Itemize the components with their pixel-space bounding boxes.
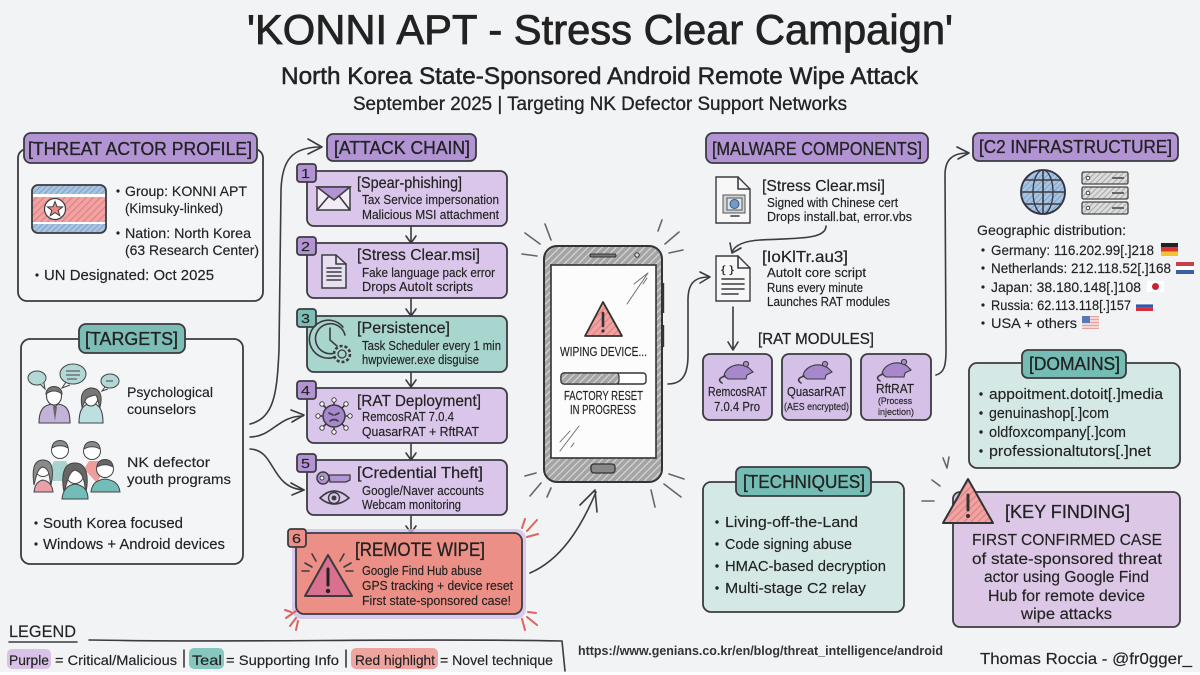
- text: group and nation: (63 Research Center): [125, 242, 259, 258]
- icon: globe: [1021, 170, 1065, 214]
- text: target scope: South Korea focused: [43, 515, 183, 532]
- author credit: Thomas Roccia - @fr0gger_: [980, 651, 1193, 668]
- text: geographic distribution: Netherlands: 212.118.52[.]168: [991, 260, 1171, 276]
- step 4: RAT deployment: [297, 381, 507, 443]
- step 5: credential theft: Webcam monitoring: [362, 498, 461, 512]
- step 2: stress clear msi: [297, 237, 507, 298]
- step 6: remote wipe: GPS tracking + device reset: [362, 579, 514, 593]
- text: IoKlTr script: AutoIt core script: [767, 266, 867, 280]
- module: RftRAT: (Process: [878, 396, 912, 407]
- heading: malware components: [MALWARE COMPONENTS]: [712, 139, 922, 159]
- module: RemcosRAT: 7.0.4 Pro: [714, 400, 760, 414]
- step 3: persistence: Task Scheduler every 1 min: [362, 339, 501, 353]
- text: geographic distribution: USA + others: [991, 315, 1077, 331]
- text: group and nation: Nation: North Korea: [125, 225, 251, 241]
- module: QuasarRAT: (AES encrypted): [784, 402, 849, 413]
- text: group and nation: [116, 183, 259, 258]
- text: psychological counselors: Psychological: [127, 384, 213, 400]
- text: group and nation: Group: KONNI APT: [125, 183, 247, 199]
- phone: wiping device: IN PROGRESS: [570, 403, 636, 417]
- chain arrows: [406, 227, 416, 533]
- heading: C2 infrastructure: [C2 INFRASTRUCTURE]: [979, 137, 1172, 157]
- panel: legend: [7, 622, 565, 671]
- step 3: persistence: [297, 309, 507, 372]
- text: key finding body: wipe attacks: [1020, 606, 1112, 623]
- panel: targets: [21, 324, 243, 564]
- panel: key finding: [922, 457, 1180, 627]
- icon: server rack: [1082, 172, 1128, 214]
- text: key finding body: FIRST CONFIRMED CASE: [972, 532, 1162, 549]
- heading: threat actor profile: [THREAT ACTOR PROFILE]: [28, 139, 252, 159]
- panel: C2 infrastructure: [973, 133, 1194, 331]
- step 6: remote wipe: [REMOTE WIPE]: [355, 540, 485, 561]
- text: stress clear msi: [Stress Clear.msi]: [762, 178, 885, 195]
- step 4: RAT deployment: QuasarRAT + RftRAT: [362, 425, 479, 439]
- text: domain list: appoitment.dotoit[.]media: [989, 386, 1164, 403]
- icon: rat: [878, 359, 911, 381]
- text: technique list: Living-off-the-Land: [725, 514, 858, 531]
- text: NK defector youth programs: NK defector: [127, 454, 210, 470]
- icon: clock and gear: [309, 320, 350, 362]
- text: stress clear msi: Signed with Chinese cert: [767, 196, 898, 210]
- icon: rat: [799, 361, 832, 383]
- panel: domains: [969, 350, 1180, 468]
- text: psychological counselors: counselors: [127, 401, 196, 417]
- step 6: remote wipe: Google Find Hub abuse: [362, 564, 482, 578]
- heading: C2 infrastructure: [973, 133, 1178, 161]
- source URL: https://www.genians.co.kr/en/blog/threat_intelligence/android: [578, 643, 943, 658]
- text: domain list: genuinashop[.]com: [989, 405, 1109, 422]
- heading: domains: [DOMAINS]: [1029, 354, 1120, 374]
- text: stress clear msi: [762, 178, 912, 224]
- icon: document: [322, 255, 346, 288]
- step 1: spear-phishing: Tax Service impersonation: [362, 193, 499, 207]
- icon: script file: [716, 256, 750, 301]
- legend key: red highlight: Red highlight: [355, 652, 435, 668]
- legend key: teal: Teal: [192, 652, 222, 668]
- step 1: spear-phishing: Malicious MSI attachment: [362, 208, 500, 222]
- phone: wiping device: FACTORY RESET: [564, 389, 643, 403]
- heading: targets: [79, 324, 185, 353]
- reflection strokes: [560, 273, 648, 451]
- text: IoKlTr script: Runs every minute: [767, 281, 863, 295]
- icon: virus: [316, 398, 352, 434]
- heading: techniques: [736, 467, 871, 496]
- icon: msi file: [716, 177, 750, 223]
- heading: attack chain: [ATTACK CHAIN]: [334, 138, 470, 158]
- icon: USA flag: [1082, 316, 1099, 329]
- text: IoKlTr script: Launches RAT modules: [767, 295, 890, 309]
- text: psychological counselors: [127, 384, 213, 417]
- text: IoKlTr script: [762, 249, 890, 309]
- arrow: targets to credential theft: [250, 449, 304, 495]
- step 2: stress clear msi: Fake language pack error: [362, 266, 495, 280]
- module: QuasarRAT: QuasarRAT: [787, 385, 846, 399]
- icon: Japan flag: [1147, 281, 1164, 292]
- heading: domains: [1022, 350, 1126, 378]
- text: UN designation: UN Designated: Oct 2025: [44, 267, 214, 284]
- panel: legend: = Novel technique: [440, 652, 553, 668]
- subtitle: North Korea State-Sponsored Android Remote Wipe Attack: [281, 63, 919, 90]
- phone: wiping device: [522, 220, 684, 507]
- text: technique list: [715, 514, 886, 597]
- arrow: RAT modules to C2: [936, 147, 969, 375]
- panel: threat actor profile: [18, 133, 263, 301]
- text: NK defector youth programs: youth programs: [127, 471, 231, 487]
- text: domain list: oldfoxcompany[.]com: [989, 424, 1126, 441]
- module: RftRAT: RftRAT: [876, 382, 914, 396]
- step 5: credential theft: [297, 454, 507, 515]
- panel: techniques: [703, 467, 904, 612]
- text: domain list: [979, 386, 1164, 460]
- step 1: spear-phishing: [297, 164, 507, 226]
- icon: rat: [720, 361, 753, 383]
- step 3: persistence: [Persistence]: [357, 320, 450, 337]
- step 1: spear-phishing: 1: [301, 166, 310, 181]
- text: stress clear msi: Drops install.bat, error.vbs: [767, 210, 912, 224]
- panel: attack chain: [285, 134, 538, 630]
- progress bar: [561, 373, 646, 384]
- step 2: stress clear msi: [Stress Clear.msi]: [357, 247, 480, 264]
- arrow: targets to attack chain: [250, 139, 322, 424]
- text: geographic distribution: [977, 222, 1171, 331]
- step 2: stress clear msi: 2: [301, 239, 310, 254]
- step 4: RAT deployment: RemcosRAT 7.0.4: [362, 410, 454, 424]
- panel: legend: = Supporting Info: [226, 652, 339, 668]
- step 4: RAT deployment: 4: [301, 383, 310, 398]
- icon: phone warning: [585, 302, 622, 336]
- arrow: phone to malware components: [668, 272, 710, 384]
- module: RftRAT: injection): [878, 407, 914, 418]
- text: technique list: HMAC-based decryption: [725, 558, 886, 575]
- icon: Germany flag: [1161, 243, 1178, 256]
- step 6: remote wipe: [285, 519, 538, 630]
- text: NK defector youth programs: [127, 454, 231, 487]
- text: geographic distribution: Germany: 116.202.99[.]218: [991, 242, 1154, 258]
- icon: psychological counselors: [28, 364, 119, 423]
- icon: envelope: [317, 187, 350, 210]
- icon: warning triangle: [302, 554, 353, 596]
- module: RemcosRAT: [703, 354, 772, 420]
- phone rays: [522, 220, 684, 507]
- text: IoKlTr script: [IoKlTr.au3]: [762, 249, 848, 266]
- legend key: purple: Purple: [9, 652, 49, 668]
- icon: NK defector youth group: [33, 440, 120, 499]
- step 5: credential theft: [Credential Theft]: [357, 465, 483, 482]
- legend key: teal: [189, 648, 224, 669]
- icon: Russia flag: [1136, 301, 1153, 311]
- text: key finding body: of state-sponsored threat: [972, 551, 1163, 568]
- red alert rays: [285, 519, 538, 630]
- text: key finding body: [972, 532, 1163, 623]
- text: geographic distribution: Russia: 62.113.118[.]157: [991, 297, 1131, 313]
- arrow: targets to RAT deployment: [250, 410, 304, 437]
- text: key finding body: actor using Google Find: [984, 569, 1149, 586]
- heading: attack chain: [327, 134, 476, 161]
- icon: key and eye: [317, 472, 350, 504]
- step 2: stress clear msi: Drops AutoIt scripts: [362, 280, 473, 294]
- heading: techniques: [TECHNIQUES]: [743, 472, 865, 492]
- step 1: spear-phishing: [Spear-phishing]: [357, 175, 462, 192]
- module: RftRAT: [861, 354, 931, 420]
- icon: warning triangle: [922, 457, 993, 523]
- icon: North Korea flag: [32, 185, 106, 233]
- panel: malware components: [703, 133, 931, 420]
- text: technique list: Multi-stage C2 relay: [725, 580, 867, 597]
- panel: legend: = Critical/Malicious: [55, 652, 177, 668]
- heading: targets: [TARGETS]: [85, 329, 178, 349]
- text: domain list: professionaltutors[.]net: [989, 443, 1152, 460]
- step 3: persistence: 3: [301, 311, 310, 326]
- heading: threat actor profile: [24, 133, 257, 163]
- arrow: script to RAT modules: [728, 307, 738, 350]
- title: 'KONNI APT - Stress Clear Campaign': [247, 6, 953, 53]
- text: key finding body: Hub for remote device: [988, 588, 1145, 605]
- icon: script file: { }: [721, 265, 735, 276]
- heading: RAT modules: [RAT MODULES]: [758, 331, 874, 348]
- phone: wiping device: WIPING DEVICE...: [560, 344, 647, 359]
- icon: Netherlands flag: [1176, 262, 1194, 274]
- text: target scope: [34, 515, 225, 553]
- arrow: msi to script: [730, 226, 826, 253]
- text: group and nation: (Kimsuky-linked): [125, 200, 223, 216]
- step 5: credential theft: 5: [301, 456, 310, 471]
- text: target scope: Windows + Android devices: [43, 536, 225, 553]
- arrow: remote wipe to phone: [530, 490, 597, 573]
- date and target line: September 2025 | Targeting NK Defector Support Networks: [353, 94, 847, 115]
- step 6: remote wipe: 6: [292, 531, 301, 546]
- module: QuasarRAT: [782, 354, 851, 420]
- module: RemcosRAT: RemcosRAT: [708, 385, 767, 399]
- text: geographic distribution: Geographic distribution:: [977, 222, 1126, 238]
- step 5: credential theft: Google/Naver accounts: [362, 484, 484, 498]
- text: geographic distribution: Japan: 38.180.148[.]108: [991, 279, 1141, 295]
- text: technique list: Code signing abuse: [725, 536, 852, 553]
- panel: legend: LEGEND: [9, 622, 76, 641]
- step 4: RAT deployment: [RAT Deployment]: [357, 393, 481, 410]
- heading: malware components: [706, 133, 928, 163]
- step 6: remote wipe: First state-sponsored case!: [362, 594, 511, 608]
- panel: key finding: [KEY FINDING]: [1005, 502, 1130, 522]
- step 3: persistence: hwpviewer.exe disguise: [362, 353, 479, 367]
